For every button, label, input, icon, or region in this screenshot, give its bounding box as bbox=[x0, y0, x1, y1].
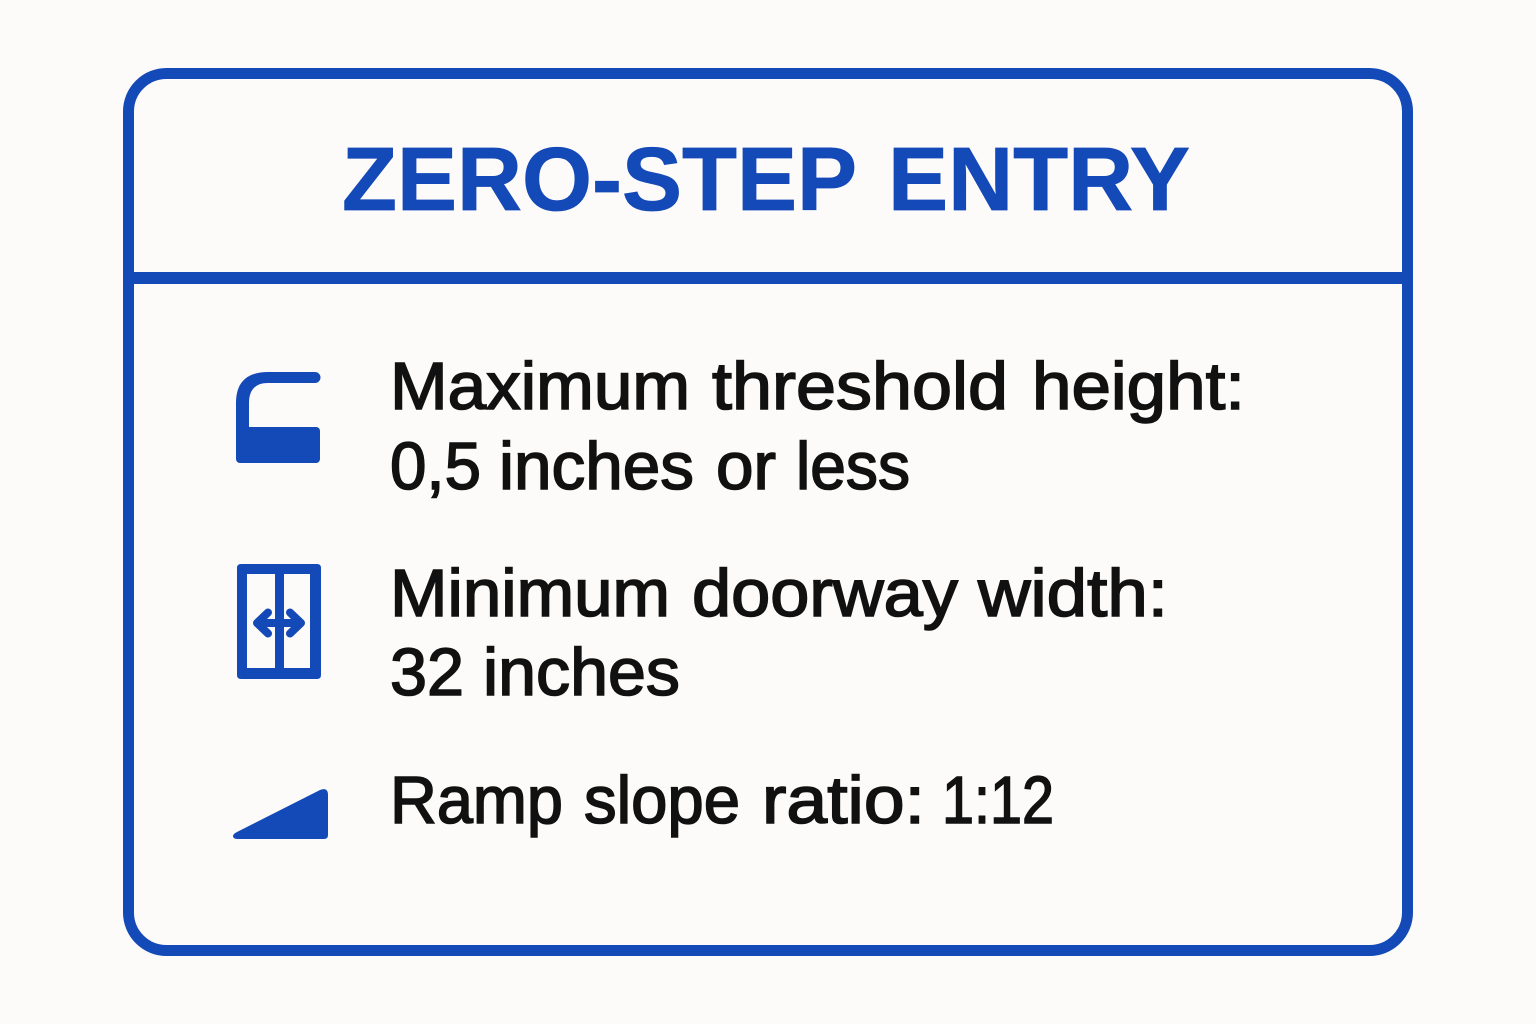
text: threshold height: or bbox=[716, 429, 776, 504]
text: doorway width: 32 bbox=[390, 635, 464, 710]
title: ZERO-STEP bbox=[342, 130, 857, 230]
text: doorway width: inches bbox=[483, 635, 680, 710]
text: ramp slope: ratio: bbox=[762, 763, 925, 838]
icon: doorway with width arrows bbox=[237, 564, 321, 679]
text: threshold height: inches bbox=[499, 429, 694, 504]
panel: zero-step entry card bbox=[128, 74, 1408, 950]
text: ramp slope bbox=[390, 763, 1054, 838]
text: threshold height: Maximum bbox=[390, 349, 690, 424]
icon: ramp bbox=[233, 789, 328, 839]
text: ramp slope: 1:12 bbox=[942, 763, 1054, 838]
title bbox=[342, 130, 1190, 230]
title: ENTRY bbox=[888, 130, 1190, 230]
text: threshold height: height: bbox=[1032, 349, 1245, 424]
text: threshold height: 0,5 bbox=[390, 429, 481, 504]
text: doorway width: doorway bbox=[692, 556, 959, 631]
text: doorway width bbox=[390, 556, 1168, 710]
text: threshold height bbox=[390, 349, 1245, 504]
text: threshold height: less bbox=[796, 429, 910, 504]
text: threshold height: threshold bbox=[712, 349, 1008, 424]
text: ramp slope: Ramp bbox=[390, 763, 563, 838]
text: doorway width: width: bbox=[977, 556, 1168, 631]
text: ramp slope: slope bbox=[584, 763, 740, 838]
icon: threshold bbox=[236, 372, 320, 463]
text: doorway width: Minimum bbox=[390, 556, 670, 631]
